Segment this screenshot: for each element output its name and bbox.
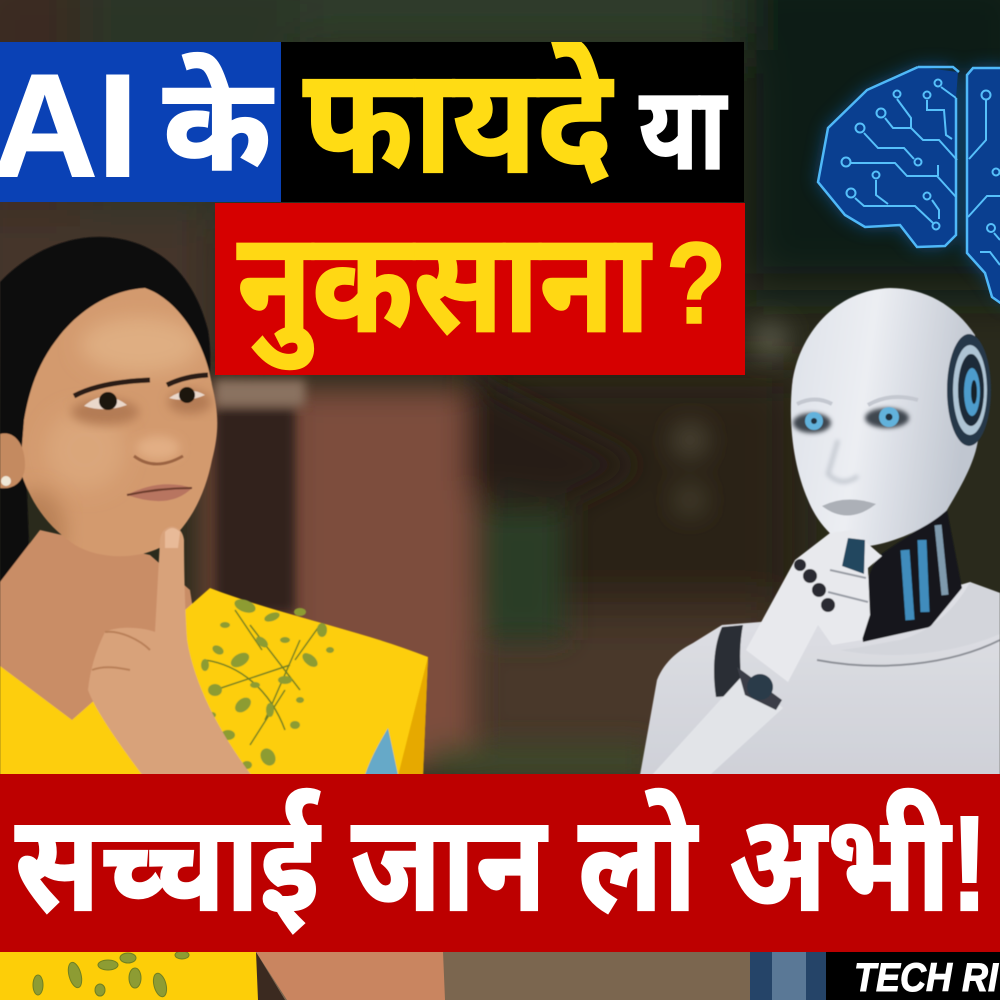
earring xyxy=(1,476,11,486)
title segment: फायदे या on black: या xyxy=(639,62,726,194)
woman figure xyxy=(0,236,429,774)
yellow sari lower part xyxy=(0,952,262,1000)
title segment: AI के on blue xyxy=(0,42,281,202)
robot dark arm strip xyxy=(714,625,745,697)
robot collar xyxy=(840,582,1000,655)
title segment: नुकसाना? on red: नुकसाना xyxy=(237,204,650,362)
neck and chest xyxy=(0,530,220,780)
robot neck xyxy=(858,510,962,642)
brand tag: TECH RI xyxy=(854,956,998,1000)
robot ear ring xyxy=(947,334,991,446)
long black hair xyxy=(0,237,210,582)
title segment: नुकसाना? on red: ? xyxy=(666,218,726,348)
robot eyes xyxy=(793,413,831,433)
dark gap xyxy=(256,952,285,1000)
bottom banner: सच्चाई जान लो अभी! xyxy=(15,789,989,940)
yellow sari xyxy=(0,588,428,776)
face shading xyxy=(24,300,214,538)
ear xyxy=(0,433,25,488)
robot torso xyxy=(640,582,1000,775)
robot nose and mouth xyxy=(828,440,858,482)
eyes xyxy=(84,397,127,409)
face xyxy=(20,288,217,556)
lips xyxy=(127,484,192,501)
title segment: AI के on blue: के xyxy=(163,51,272,198)
blue patch xyxy=(365,728,398,775)
eyebrows xyxy=(74,380,150,396)
robot head xyxy=(791,288,978,547)
lower floral xyxy=(33,951,189,998)
robot lower mechanism xyxy=(750,952,826,1000)
robot hand xyxy=(746,530,882,682)
sari sleeve fold xyxy=(398,657,428,776)
woman's forearm xyxy=(256,952,445,1000)
nose xyxy=(136,436,180,460)
hand with raised finger xyxy=(88,526,252,776)
floral embroidery xyxy=(201,597,334,769)
robot wrist joint and forearm xyxy=(652,675,783,775)
title segment: फायदे या on black xyxy=(281,42,744,202)
